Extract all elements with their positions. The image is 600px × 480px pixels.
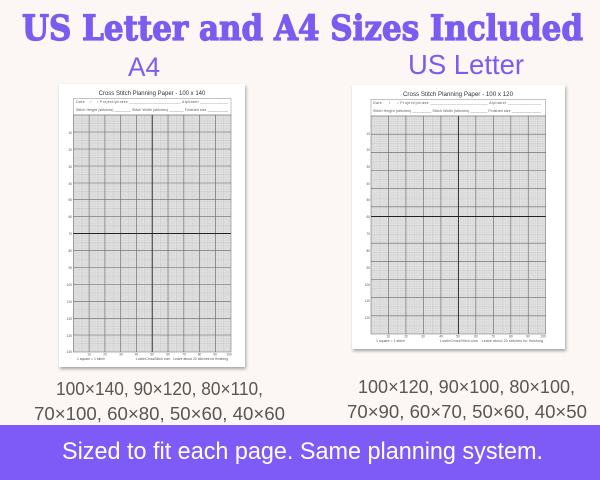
axis labels: 90	[366, 266, 370, 270]
axis labels: 70	[491, 334, 495, 338]
form fields: Stitch Height (stitches) ________ Stitch Width (stitches) _______ Finished size __________	[76, 108, 228, 112]
axis labels: 20	[68, 148, 72, 152]
sheet footer: 1 square = 1 stitch	[77, 357, 105, 361]
axis labels: 10	[386, 334, 390, 338]
sheet footer: LostInCrossStitch.com Leave about 20 stitches for finishing	[136, 357, 228, 361]
axis labels: 80	[366, 249, 370, 253]
axis labels: 10	[366, 132, 370, 136]
sheet footer	[77, 357, 228, 361]
axis labels: 90	[526, 334, 530, 338]
axis labels: 120	[67, 317, 72, 321]
form fields	[371, 100, 546, 116]
form fields	[73, 98, 231, 115]
axis labels: 30	[421, 334, 425, 338]
axis labels: 100	[540, 334, 546, 338]
sheet footer	[376, 339, 543, 343]
axis labels: 20	[366, 148, 370, 152]
axis labels: 80	[509, 334, 513, 338]
axis labels: 60	[366, 215, 370, 219]
axis labels: 60	[166, 352, 170, 356]
axis labels: 60	[68, 215, 72, 219]
axis labels: 80	[68, 249, 72, 253]
axis labels: 70	[366, 232, 370, 236]
axis labels: 40	[68, 182, 72, 186]
footer banner	[0, 425, 600, 480]
axis labels: 50	[456, 334, 460, 338]
sheet footer: LostInCrossStitch.com Leave about 20 stitches for finishing	[440, 339, 543, 343]
grid	[73, 115, 231, 352]
size list: A4: 100×140, 90×120, 80×110,	[56, 379, 263, 399]
form fields: Stitch Height (stitches) _________ Stitch Width (stitches) ________ Finished size ______________	[373, 109, 542, 113]
size list: A4: 70×100, 60×80, 50×60, 40×60	[34, 404, 285, 424]
size list: A4	[34, 379, 285, 424]
axis labels: 50	[366, 198, 370, 202]
axis labels: 90	[68, 266, 72, 270]
axis labels: 120	[365, 316, 370, 320]
axis labels: 100	[67, 283, 72, 287]
axis labels: 30	[119, 352, 123, 356]
axis labels: 30	[366, 165, 370, 169]
axis labels: 60	[474, 334, 478, 338]
axis labels: 100	[365, 283, 370, 287]
form fields: Date / / Project/phrase ________________________ Alphabet ______________	[373, 101, 542, 105]
size list: US Letter: 100×120, 90×100, 80×100,	[358, 377, 575, 397]
axis labels: 40	[135, 352, 138, 356]
axis labels	[67, 131, 232, 356]
axis labels: 100	[226, 352, 232, 356]
axis labels: 110	[365, 299, 370, 303]
axis labels: 130	[67, 334, 72, 338]
axis labels: 140	[67, 350, 72, 354]
panel: US Letter planning sheet	[352, 85, 565, 349]
axis labels: 70	[182, 352, 186, 356]
form fields: Date / / Project/phrase ______________________ Alphabet ____________	[76, 100, 228, 104]
axis labels: 50	[68, 198, 72, 202]
grid	[371, 116, 546, 334]
axis labels: 70	[68, 232, 72, 236]
sheet title: Cross Stitch Planning Paper - 100 x 120	[403, 91, 514, 98]
heading: A4: A4	[128, 52, 160, 82]
axis labels: 50	[150, 352, 154, 356]
panel: A4 planning sheet	[59, 84, 245, 367]
size list: US Letter: 70×90, 60×70, 50×60, 40×50	[347, 402, 587, 422]
size list: US Letter	[347, 377, 587, 422]
axis labels: 20	[404, 334, 408, 338]
axis labels: 20	[103, 352, 107, 356]
axis labels: 80	[198, 352, 201, 356]
axis labels: 10	[68, 131, 72, 135]
axis labels: 10	[87, 352, 91, 356]
axis labels: 30	[68, 165, 72, 169]
sheet title: Cross Stitch Planning Paper - 100 x 140	[99, 91, 206, 97]
axis labels: 90	[213, 352, 217, 356]
axis labels	[365, 132, 546, 338]
banner text: Sized to fit each page. Same planning system.	[62, 438, 543, 465]
axis labels: 40	[439, 334, 443, 338]
axis labels: 40	[366, 182, 370, 186]
sheet footer: 1 square = 1 stitch	[376, 339, 405, 343]
heading: US Letter: US Letter	[408, 49, 524, 80]
axis labels: 110	[67, 300, 72, 304]
